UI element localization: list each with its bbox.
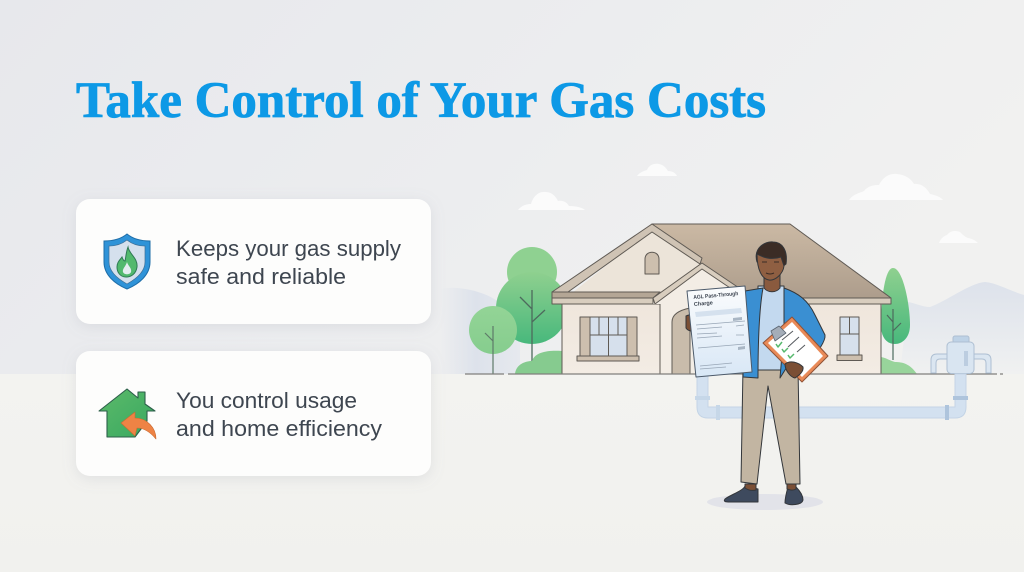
card text: safe and reliable xyxy=(176,264,346,289)
right hand xyxy=(785,362,803,378)
shirt xyxy=(758,286,784,370)
porch gable xyxy=(653,263,760,374)
main roof xyxy=(575,224,891,298)
icon: green house with orange arrow xyxy=(99,389,156,439)
shoes xyxy=(724,486,803,505)
man holding bill and clipboard xyxy=(686,242,828,510)
left eave board xyxy=(552,298,653,304)
left window xyxy=(577,317,639,361)
ankles xyxy=(745,484,796,490)
entry arch xyxy=(672,308,690,374)
background sky xyxy=(0,0,1024,374)
right window xyxy=(837,317,862,360)
left trees xyxy=(469,247,568,374)
hair xyxy=(756,242,786,268)
jacket left xyxy=(743,288,763,378)
clouds xyxy=(518,164,978,243)
panel: safe supply card xyxy=(76,199,431,324)
card text xyxy=(176,236,402,289)
bill document: AGL Pass-Through xyxy=(693,291,739,301)
ground line xyxy=(465,373,1003,375)
left hand xyxy=(686,315,696,331)
jacket right xyxy=(780,288,825,378)
title: Take Control of Your Gas Costs xyxy=(76,73,766,129)
mountains xyxy=(440,282,1024,374)
underground gas pipe xyxy=(695,374,968,420)
face details xyxy=(762,262,779,274)
card text: Keeps your gas supply xyxy=(176,236,402,261)
right eave xyxy=(745,298,891,304)
porch post xyxy=(653,304,660,374)
head xyxy=(757,254,784,280)
clipboard xyxy=(763,317,828,382)
gas meter xyxy=(931,336,991,374)
walls xyxy=(562,304,881,374)
panel: usage control card xyxy=(76,351,431,476)
bill document xyxy=(687,286,752,377)
neck xyxy=(764,275,780,292)
right tree and bush xyxy=(881,268,917,374)
house xyxy=(552,224,891,374)
bill document: Charge xyxy=(694,300,713,308)
ground shadow xyxy=(707,494,823,510)
card text: and home efficiency xyxy=(176,416,383,441)
card text: You control usage xyxy=(176,388,357,413)
gable window xyxy=(645,252,659,274)
icon: shield with flame xyxy=(104,234,150,289)
card text xyxy=(176,388,383,441)
front gable xyxy=(572,229,742,304)
trousers xyxy=(741,367,800,484)
background ground xyxy=(0,374,1024,572)
left eave xyxy=(552,292,660,298)
